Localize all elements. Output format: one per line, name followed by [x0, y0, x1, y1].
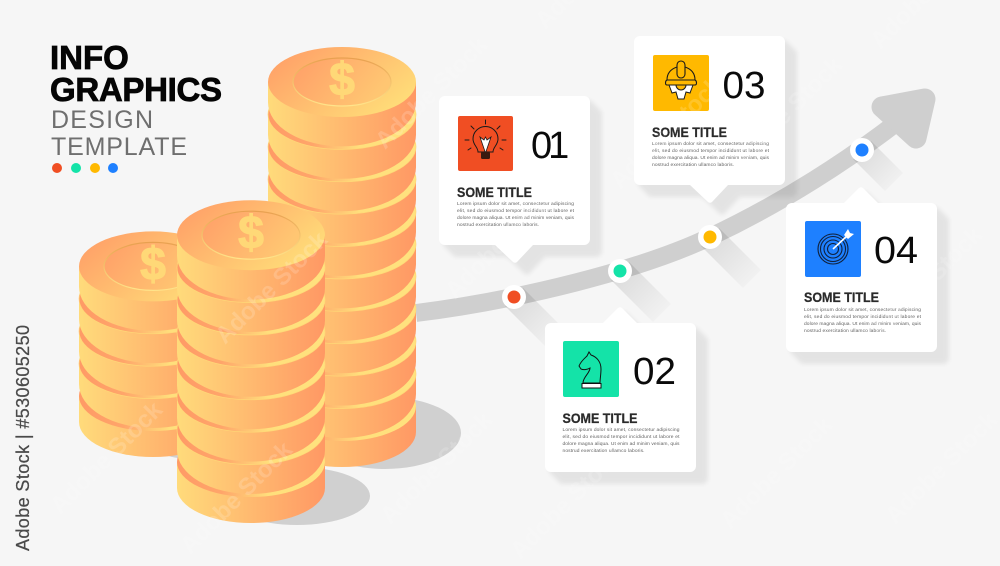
text block	[652, 141, 770, 168]
watermark pattern: Adobe Stock	[865, 221, 988, 344]
title block	[50, 39, 222, 161]
text block: Lorem ipsum dolor sit amet, consectetur adipiscing	[457, 201, 574, 207]
growth arrow	[416, 99, 925, 313]
text block: elit, sed do eiusmod tempor incididunt ut labore et	[457, 208, 575, 214]
title block: TEMPLATE	[51, 133, 187, 161]
text block: elit, sed do eiusmod tempor incididunt ut labore et	[804, 314, 922, 320]
watermark pattern: Adobe Stock	[715, 411, 838, 534]
text block: dolore magna aliqua. Ut enim ad minim veniam, quis	[652, 155, 770, 161]
number: 01	[531, 125, 568, 167]
text block: dolore magna aliqua. Ut enim ad minim veniam, quis	[562, 441, 680, 447]
icon: target and dart	[805, 221, 861, 277]
text block: nostrud exercitation ullamco laboris.	[652, 162, 734, 168]
heading: SOME TITLE	[804, 289, 879, 305]
number: 04	[874, 230, 918, 272]
title block: GRAPHICS	[50, 71, 222, 108]
icon: helmet and gear	[653, 55, 709, 111]
text block: Lorem ipsum dolor sit amet, consectetur adipiscing	[804, 307, 921, 313]
number: 03	[722, 65, 766, 107]
text block: Lorem ipsum dolor sit amet, consectetur adipiscing	[652, 141, 769, 147]
text block: dolore magna aliqua. Ut enim ad minim veniam, quis	[804, 321, 922, 327]
legend dots	[52, 163, 118, 173]
stock id label: Adobe Stock | #530605250	[13, 325, 33, 551]
marker: green	[608, 259, 671, 322]
watermark pattern: Adobe Stock	[175, 436, 298, 559]
text block	[804, 307, 922, 334]
coin stack: tall back	[268, 47, 416, 467]
coin stack: short left	[79, 231, 227, 457]
text block: elit, sed do eiusmod tempor incididunt ut labore et	[562, 434, 680, 440]
coin shadows	[150, 397, 461, 525]
text block: dolore magna aliqua. Ut enim ad minim veniam, quis	[457, 215, 575, 221]
text block: Lorem ipsum dolor sit amet, consectetur adipiscing	[562, 427, 680, 433]
watermark pattern: Adobe Stock	[370, 31, 493, 154]
title block: INFO	[50, 39, 129, 76]
title block: DESIGN	[51, 106, 153, 134]
text block: nostrud exercitation ullamco laboris.	[562, 448, 644, 454]
heading: SOME TITLE	[652, 124, 727, 140]
marker: red	[502, 285, 565, 348]
panel: card 04	[786, 187, 949, 364]
watermark pattern: Adobe Stock	[440, 181, 563, 304]
heading: SOME TITLE	[562, 410, 638, 426]
text block: nostrud exercitation ullamco laboris.	[457, 222, 539, 228]
text block	[457, 201, 575, 228]
panel: card 03	[634, 36, 797, 215]
icon: chess knight	[563, 341, 619, 397]
text block: nostrud exercitation ullamco laboris.	[804, 328, 886, 334]
marker: blue	[850, 138, 903, 191]
coin stack: front	[177, 200, 325, 523]
watermark pattern: Adobe Stock	[45, 396, 168, 519]
panel: card 01	[439, 96, 602, 275]
heading: SOME TITLE	[457, 184, 532, 200]
watermark pattern: Adobe Stock	[210, 226, 333, 349]
text block: elit, sed do eiusmod tempor incididunt ut labore et	[652, 148, 770, 154]
icon: light bulb	[458, 116, 513, 171]
number: 02	[633, 351, 676, 393]
watermark pattern: Adobe Stock	[880, 406, 1000, 529]
marker: yellow	[698, 225, 761, 288]
watermark pattern: Adobe Stock	[725, 51, 848, 174]
watermark pattern: Adobe Stock	[605, 71, 728, 194]
text block	[562, 427, 680, 454]
watermark pattern: Adobe Stock	[505, 441, 628, 564]
watermark pattern: Adobe Stock	[375, 406, 498, 529]
panel: card 02	[545, 307, 708, 484]
